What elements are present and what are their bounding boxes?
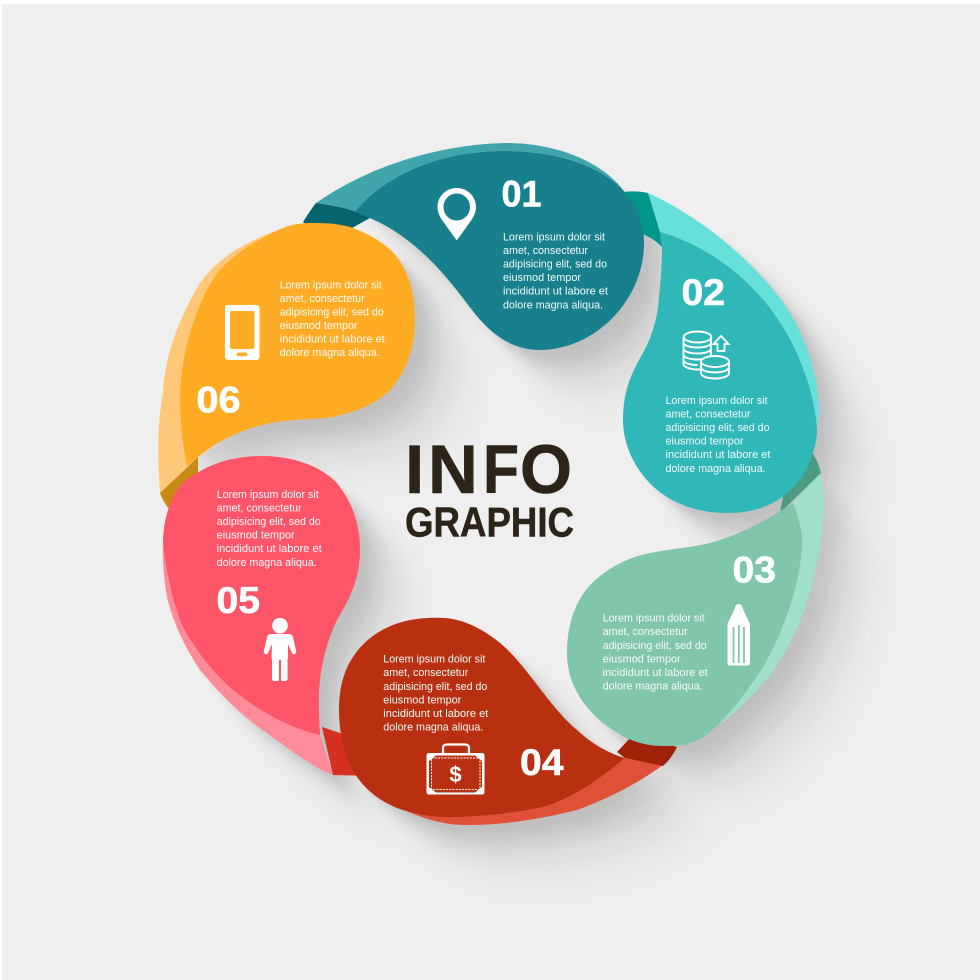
text block 06: eiusmod tempor: [280, 320, 358, 332]
text block 05: amet, consectetur: [217, 502, 302, 514]
icon: person: [264, 618, 296, 681]
text block 05: dolore magna aliqua.: [217, 557, 317, 569]
title: GRAPHIC: [405, 498, 574, 546]
band: 01 light rim: [316, 143, 623, 212]
icon: map pin: [438, 188, 476, 240]
number 03: 03: [732, 550, 776, 590]
number 01: 01: [502, 174, 542, 214]
title: N: [428, 431, 478, 508]
panel: wheel of six petals: [158, 143, 824, 825]
number 05: 05: [216, 580, 260, 621]
text block 05: Lorem ipsum dolor sit: [217, 489, 319, 501]
text block 06: [280, 279, 385, 359]
number 02: 02: [682, 272, 725, 313]
number 06: 06: [196, 380, 240, 420]
band: 04 light rim: [382, 758, 663, 825]
text block 05: [217, 489, 322, 569]
icon: money case: [426, 744, 484, 794]
text block 03: amet, consectetur: [603, 626, 688, 638]
title: O: [520, 431, 572, 508]
band: 02 light rim: [648, 193, 819, 430]
text block 01: dolore magna aliqua.: [503, 299, 603, 311]
fold: 03 dark: [780, 452, 821, 513]
text block 02: [666, 395, 771, 475]
text block 01: adipisicing elit, sed do: [503, 259, 607, 271]
text block 01: amet, consectetur: [503, 245, 588, 257]
text block 06: Lorem ipsum dolor sit: [280, 279, 382, 291]
text block 02: dolore magna aliqua.: [666, 463, 766, 475]
text block 05: adipisicing elit, sed do: [217, 516, 321, 528]
petal 03: [567, 503, 802, 746]
text block 04: adipisicing elit, sed do: [383, 681, 487, 693]
text block 02: eiusmod tempor: [666, 436, 744, 448]
text block 03: [603, 613, 708, 692]
title: [405, 431, 574, 546]
title: F: [483, 431, 519, 508]
icon: coins with arrow: [684, 332, 729, 378]
text block 01: [503, 232, 608, 311]
text block 02: amet, consectetur: [666, 408, 751, 420]
title: I: [405, 431, 424, 508]
text block 06: amet, consectetur: [280, 293, 365, 305]
band: 06 light rim: [158, 228, 283, 493]
text block 01: incididunt ut labore et: [503, 286, 608, 298]
band: 03 light rim: [697, 473, 824, 741]
text block 06: incididunt ut labore et: [280, 334, 385, 346]
text block 06: adipisicing elit, sed do: [280, 306, 384, 318]
text block 02: Lorem ipsum dolor sit: [666, 395, 768, 407]
text block 04: incididunt ut labore et: [383, 708, 488, 720]
icon: pencil: [728, 604, 750, 666]
text block 06: dolore magna aliqua.: [280, 347, 380, 359]
band: 05 light rim: [163, 543, 333, 775]
text block 02: incididunt ut labore et: [666, 449, 771, 461]
text block 04: [383, 654, 488, 734]
number 04: 04: [520, 742, 564, 783]
text block 03: adipisicing elit, sed do: [603, 640, 707, 652]
text block 03: incididunt ut labore et: [603, 667, 708, 679]
text block 01: eiusmod tempor: [503, 272, 581, 284]
text block 05: eiusmod tempor: [217, 530, 295, 542]
text block 04: Lorem ipsum dolor sit: [383, 654, 485, 666]
petal 05: [163, 456, 360, 735]
text block 02: adipisicing elit, sed do: [666, 422, 770, 434]
fold: 02 dark: [620, 191, 662, 247]
petal 01: [355, 151, 644, 350]
text block 05: incididunt ut labore et: [217, 543, 322, 555]
text block 04: dolore magna aliqua.: [383, 722, 483, 734]
text block 03: Lorem ipsum dolor sit: [603, 613, 705, 625]
text block 04: eiusmod tempor: [383, 694, 462, 706]
petal 02: [623, 232, 817, 513]
text block 04: amet, consectetur: [383, 667, 469, 679]
petal 04: [339, 618, 625, 817]
text block 01: Lorem ipsum dolor sit: [503, 232, 605, 244]
fold: 06 dark: [160, 457, 198, 520]
icon: smartphone: [225, 305, 260, 360]
icon: money case: $: [449, 762, 462, 787]
petal 06: [180, 223, 415, 467]
text block 03: eiusmod tempor: [603, 653, 681, 665]
fold: 05 dark: [322, 727, 375, 776]
fold: 04 dark: [617, 735, 677, 766]
fold: 01 dark: [303, 203, 370, 235]
text block 03: dolore magna aliqua.: [603, 680, 703, 692]
